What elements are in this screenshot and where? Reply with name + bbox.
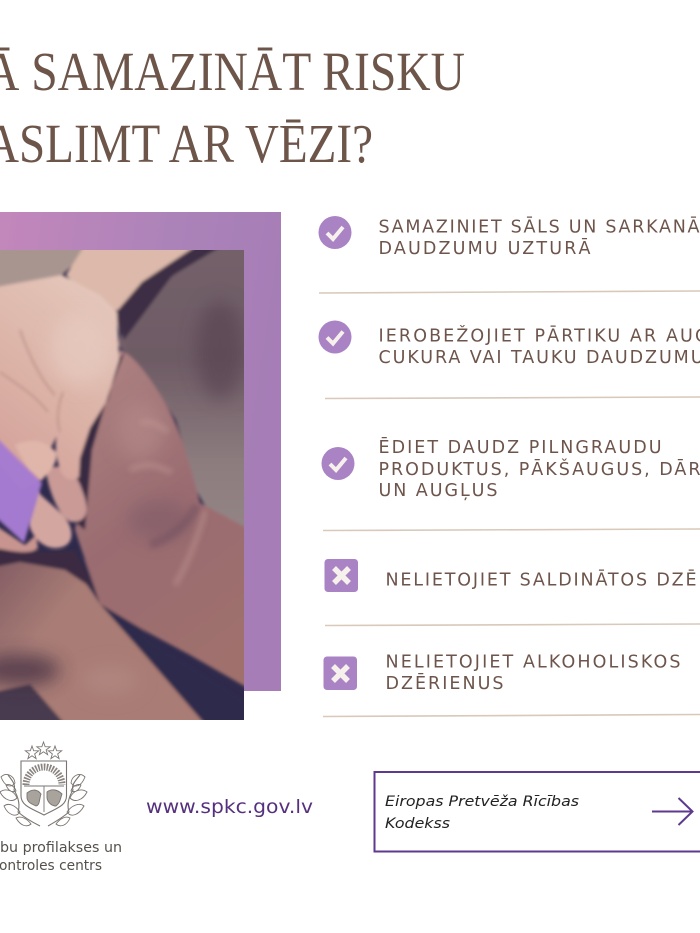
text: item 1	[378, 216, 700, 259]
icon: check 1	[318, 216, 352, 249]
text: item 2: CUKURA VAI TAUKU DAUDZUMU	[378, 348, 700, 368]
photo: hands holding purple ribbon	[0, 240, 260, 730]
text: organisation name: bu profilakses un	[0, 840, 122, 856]
icon: check 2	[318, 320, 352, 354]
text: organisation name	[0, 840, 122, 874]
text: item 2: IEROBEŽOJIET PĀRTIKU AR AUG	[378, 324, 700, 346]
callout text: Kodekss	[385, 816, 450, 832]
icon: coat of arms emblem	[0, 742, 87, 826]
text: item 3: UN AUGĻUS	[378, 481, 498, 501]
callout text	[385, 794, 579, 832]
text: item 1: SAMAZINIET SĀLS UN SARKANĀ	[378, 216, 700, 238]
text: item 5: DZĒRIENUS	[386, 672, 504, 694]
icon: cross 2	[324, 656, 357, 690]
text: item 3	[378, 436, 700, 501]
callout text: Eiropas Pretvēža Rīcības	[385, 794, 579, 810]
text: item 5	[386, 652, 680, 694]
text: organisation name: ontroles centrs	[0, 858, 102, 874]
text: item 4: NELIETOJIET SALDINĀTOS DZĒ	[386, 568, 696, 590]
text: item 3: ĒDIET DAUDZ PILNGRAUDU	[378, 436, 662, 458]
text: item 2	[378, 324, 700, 368]
text: item 1: DAUDZUMU UZTURĀ	[378, 237, 591, 259]
title: Ā SAMAZINĀT RISKU	[0, 41, 465, 102]
callout: code button	[374, 772, 700, 852]
ribbon	[0, 431, 42, 543]
arrow	[652, 798, 692, 825]
icon: cross 1	[324, 559, 358, 592]
title	[0, 41, 465, 174]
icon: check 3	[322, 447, 354, 480]
panel: gradient backdrop	[0, 212, 281, 691]
website link: www.spkc.gov.lv	[146, 796, 313, 818]
text: item 3: PRODUKTUS, PĀKŠAUGUS, DĀR	[378, 458, 700, 480]
text: item 5: NELIETOJIET ALKOHOLISKOS	[386, 652, 680, 672]
